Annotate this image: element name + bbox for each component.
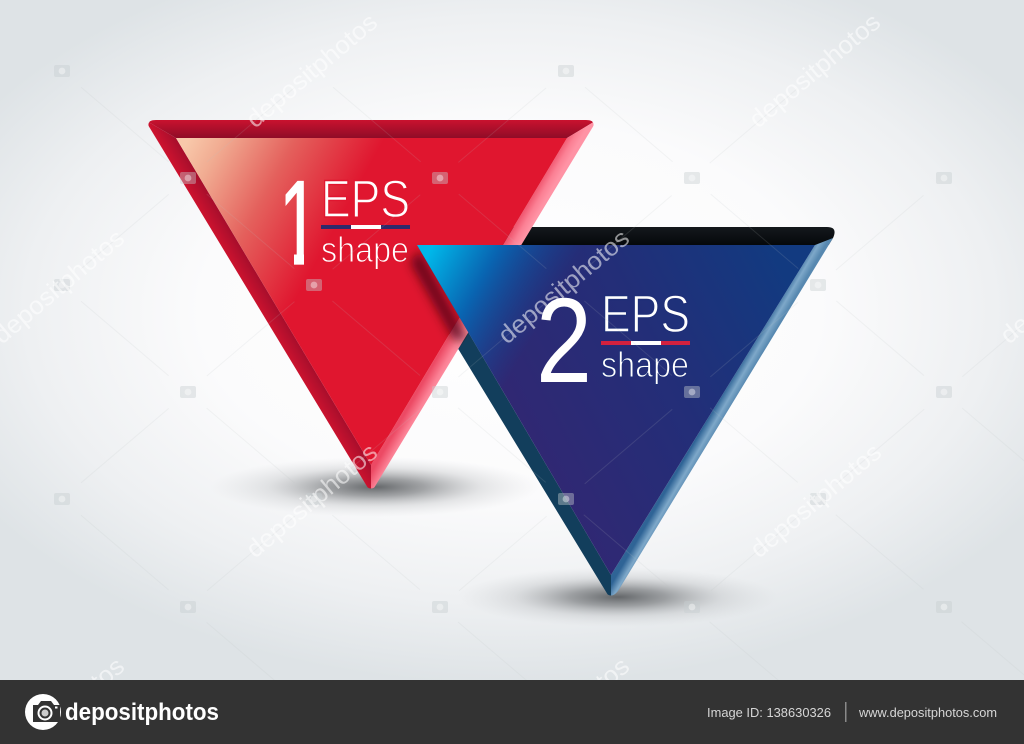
footer logo icon [25,694,61,730]
EPS label 1: EPS [321,170,410,229]
blue face [417,245,815,575]
watermark text: depositphotos [241,438,383,564]
shadow: blue triangle [458,567,778,627]
watermark camera icons [54,65,952,613]
footer logo text: depositphotos [65,699,219,726]
footer bar [0,680,1024,744]
watermark text: depositphotos [744,8,886,134]
blue bevel: right [611,238,840,600]
number 2: 2 [536,272,592,408]
watermark text: depositphotos [241,8,383,134]
watermark text: depositphotos [745,438,887,564]
panel: blue triangle front [417,238,840,600]
panel: blue triangle back bevels [449,227,835,596]
panel: red triangle [145,120,597,493]
EPS label 2: EPS [601,285,690,344]
shape label 2: shape [601,344,689,385]
site url: www.depositphotos.com [858,706,997,720]
shadow cast by blue face on red [410,250,468,340]
red bevel: top [145,120,597,138]
red face [176,138,567,465]
shadow: red triangle [210,457,540,517]
watermark text: depositphotos [493,224,635,350]
blue face highlight [417,245,815,575]
divider 1 [321,225,410,229]
red bevel: right [371,120,597,493]
red bevel: left [145,120,371,493]
shape label 1: shape [321,229,409,270]
footer separator [845,702,846,722]
image id: Image ID: 138630326 [707,706,831,720]
divider 2 [601,341,690,345]
number 1: 1 [279,156,319,290]
